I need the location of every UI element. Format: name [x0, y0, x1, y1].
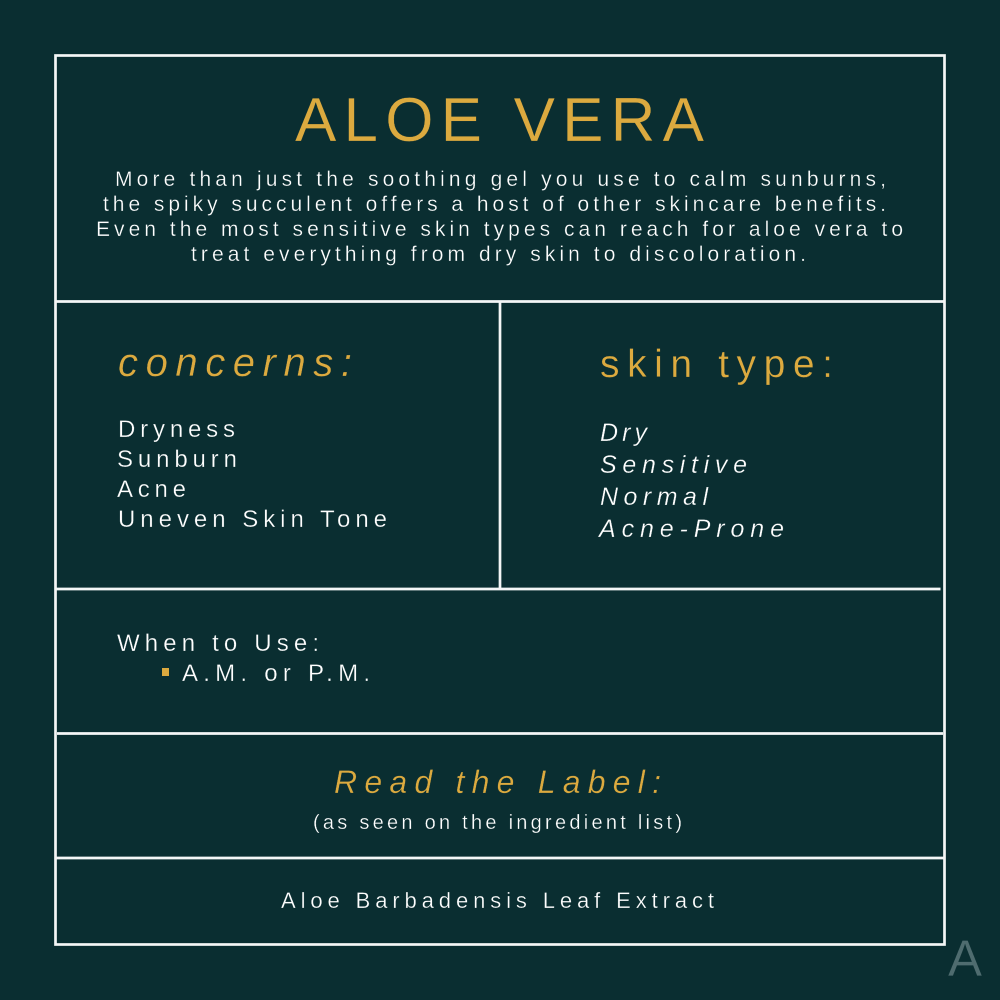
icon: bullet [162, 668, 169, 676]
when to use value: A.M. or P.M. [182, 660, 370, 687]
skin type heading: skin type: [600, 343, 833, 386]
skin type list: Acne-Prone [597, 515, 784, 543]
when to use heading: When to Use: [117, 630, 319, 657]
skin type list [597, 419, 784, 543]
read the label heading: Read the Label: [334, 764, 661, 800]
skin type list: Dry [600, 419, 648, 447]
skin type list: Sensitive [600, 451, 747, 479]
concerns list: Uneven Skin Tone [118, 506, 387, 533]
intro text: treat everything from dry skin to discoloration. [191, 243, 806, 266]
concerns list: Acne [117, 476, 186, 503]
intro text: Even the most sensitive skin types can reach for aloe vera to [96, 218, 903, 241]
concerns list: Sunburn [117, 446, 237, 473]
outer frame [56, 56, 944, 944]
intro text: More than just the soothing gel you use to calm sunburns, [115, 168, 886, 191]
panel: concerns [117, 341, 387, 533]
title: ALOE VERA [295, 86, 705, 155]
intro text [96, 168, 903, 266]
panel: read the label [313, 764, 682, 834]
panel: header [96, 86, 903, 266]
panel: when to use [117, 630, 370, 687]
watermark letter: A [948, 930, 982, 987]
concerns heading: concerns: [118, 341, 352, 385]
concerns list [117, 416, 387, 533]
panel: ingredient name: Aloe Barbadensis Leaf Extract [281, 888, 714, 913]
skin type list: Normal [600, 483, 709, 511]
panel: skin type [597, 343, 833, 543]
concerns list: Dryness [118, 416, 235, 443]
intro text: the spiky succulent offers a host of other skincare benefits. [103, 193, 886, 216]
read the label note: (as seen on the ingredient list) [313, 812, 682, 834]
